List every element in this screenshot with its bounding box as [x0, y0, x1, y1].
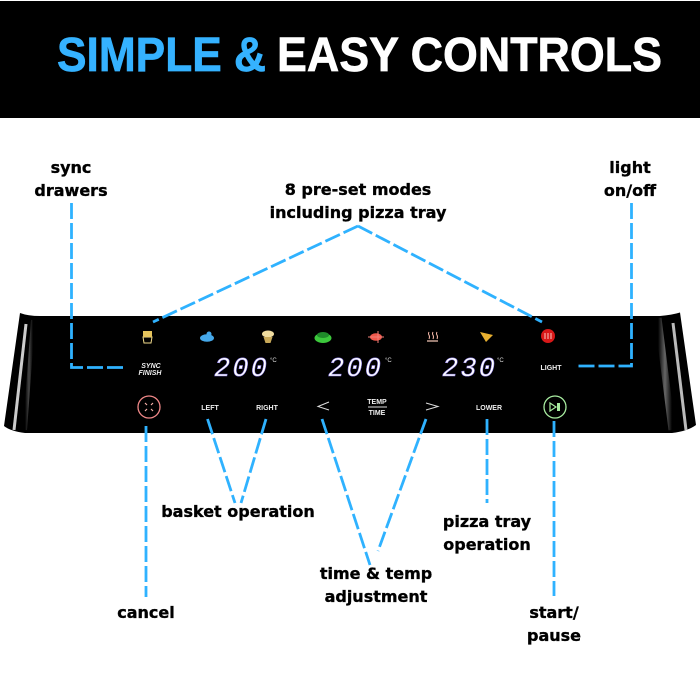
title: easy controls: EASY CONTROLS [277, 29, 662, 82]
label: pizza tray operation [443, 512, 532, 554]
icon: cake [314, 332, 332, 343]
icon: pizza [480, 332, 493, 342]
display: centre temperature: 200 [328, 355, 381, 385]
label: pre-set modes: 8 pre-set modes [285, 180, 431, 199]
icon: greater-than [426, 403, 438, 410]
arrow: light [577, 203, 632, 366]
label: temp over time: TEMP [367, 399, 387, 406]
arrow: adjustment right [378, 419, 426, 551]
icon: start button [544, 396, 566, 418]
label: light: LIGHT [540, 365, 562, 372]
label: pizza tray operation: pizza tray [443, 512, 532, 531]
label: right: RIGHT [256, 405, 279, 412]
label: time and temp adjustment [320, 564, 432, 606]
label: time and temp adjustment: time & temp [320, 564, 432, 583]
label: temp over time: TIME [369, 410, 386, 417]
degree marks: °C [385, 358, 392, 364]
icon: less-than [318, 402, 329, 410]
icon: fish [200, 332, 214, 342]
label: light on/off [604, 158, 657, 200]
label: sync drawers: sync [51, 158, 91, 177]
label: pizza tray operation: operation [443, 535, 531, 554]
label: sync drawers: drawers [34, 181, 108, 200]
label: temp over time [367, 399, 387, 417]
label: light on/off: light [609, 158, 651, 177]
label: light on/off: on/off [604, 181, 657, 200]
title banner [0, 1, 700, 118]
label: sync drawers [34, 158, 108, 200]
icon: rotisserie [368, 331, 384, 343]
label: start pause [527, 603, 581, 645]
arrow: pre-set modes right [358, 226, 542, 322]
label: start pause: start/ [529, 603, 579, 622]
arrow: start pause [553, 421, 555, 596]
label: time and temp adjustment: adjustment [325, 587, 428, 606]
arrow: pizza tray [486, 419, 488, 503]
label: left: LEFT [201, 405, 219, 412]
display: right temperature: 230 [442, 355, 495, 385]
arrow: basket left [208, 419, 235, 503]
icon: heat waves [427, 332, 438, 341]
label: sync finish: SYNC [141, 363, 162, 370]
label: pre-set modes [270, 180, 447, 222]
label: cancel: cancel [117, 603, 175, 622]
title: simple and: SIMPLE & [57, 29, 266, 82]
icon: fries [143, 331, 152, 343]
label: start pause: pause [527, 626, 581, 645]
label: lower: LOWER [476, 405, 502, 412]
arrow: adjustment left [322, 419, 370, 565]
degree marks: °C [497, 358, 504, 364]
arrow: pre-set modes left [153, 226, 358, 322]
control panel [4, 312, 696, 433]
icon: cancel button [138, 396, 160, 418]
arrow: basket right [241, 419, 266, 503]
label: basket operation: basket operation [161, 502, 315, 521]
degree marks [270, 358, 504, 364]
icon: light [541, 329, 555, 343]
label: pre-set modes: including pizza tray [270, 203, 447, 222]
display: left temperature: 200 [214, 355, 267, 385]
label: sync finish [139, 363, 162, 377]
arrow: sync drawers [72, 203, 125, 368]
arrow: cancel [145, 426, 147, 597]
icon: muffin [262, 330, 274, 343]
label: sync finish: FINISH [139, 370, 162, 377]
degree marks: °C [270, 358, 277, 364]
